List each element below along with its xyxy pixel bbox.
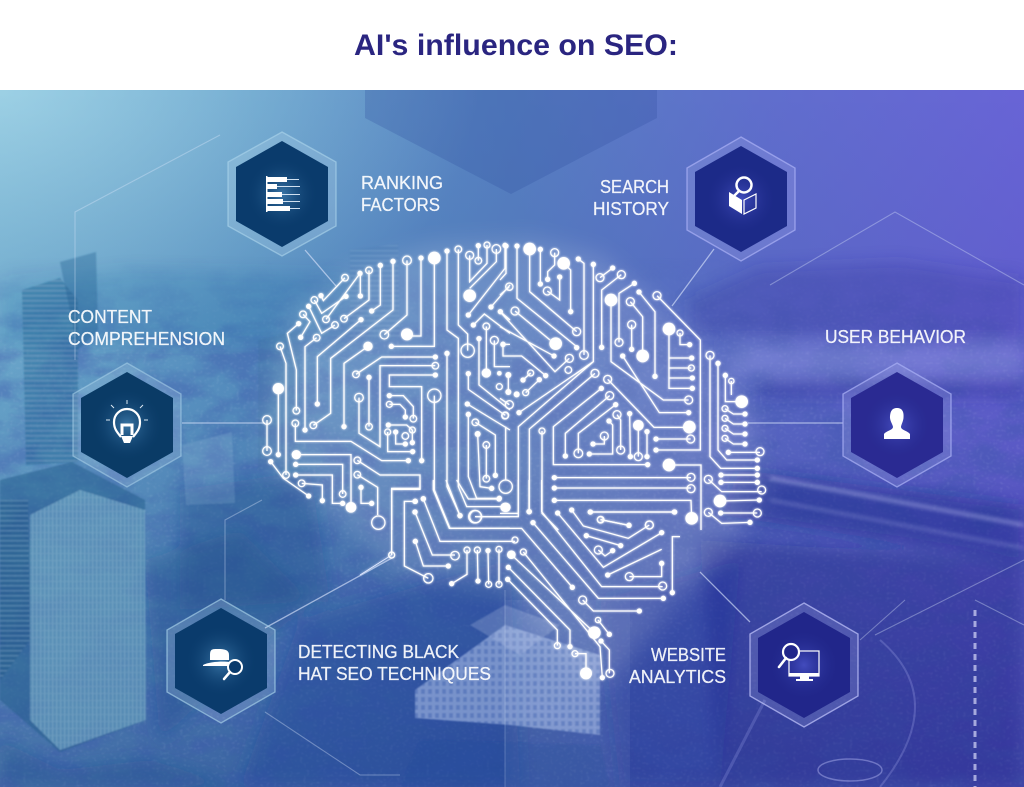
circuit: left hemisphere bbox=[263, 242, 510, 530]
label: website analytics bbox=[629, 645, 726, 687]
label: search history bbox=[593, 177, 669, 219]
label: ranking factors: FACTORS bbox=[361, 195, 440, 215]
left towers bbox=[0, 244, 400, 752]
label: detecting black hat seo techniques bbox=[298, 642, 491, 684]
icon: search history hexagon bbox=[687, 137, 795, 261]
label: website analytics: WEBSITE bbox=[651, 645, 726, 665]
central bottom building bbox=[400, 605, 610, 787]
label: content comprehension: CONTENT bbox=[68, 307, 152, 327]
icon: detecting black hat hexagon bbox=[167, 599, 275, 723]
icon: website analytics hexagon bbox=[750, 603, 858, 727]
label: search history: HISTORY bbox=[593, 199, 669, 219]
bright shore & road bbox=[770, 478, 1024, 525]
label: detecting black hat seo techniques: HAT SEO TECHNIQUES bbox=[298, 664, 491, 684]
label: detecting black hat seo techniques: DETECTING BLACK bbox=[298, 642, 459, 662]
title: AI's influence on SEO: bbox=[354, 29, 678, 62]
icon: content comprehension hexagon bbox=[73, 363, 181, 487]
label: search history: SEARCH bbox=[600, 177, 669, 197]
label: content comprehension: COMPREHENSION bbox=[68, 329, 225, 349]
label: website analytics: ANALYTICS bbox=[629, 667, 726, 687]
label: ranking factors bbox=[361, 173, 443, 215]
brain circuit illustration bbox=[263, 242, 766, 680]
icon: user behavior hexagon bbox=[843, 363, 951, 487]
label: user behavior: USER BEHAVIOR bbox=[825, 327, 966, 347]
label: content comprehension bbox=[68, 307, 225, 349]
circuit: right hemisphere bbox=[499, 243, 766, 530]
circuit: lower stem bbox=[360, 480, 680, 680]
brain glow halo bbox=[262, 238, 768, 682]
city texture bbox=[0, 282, 1024, 787]
label: ranking factors: RANKING bbox=[361, 173, 443, 193]
connector lines from icons to brain bbox=[182, 249, 843, 628]
icon: ranking factors hexagon bbox=[228, 132, 336, 256]
